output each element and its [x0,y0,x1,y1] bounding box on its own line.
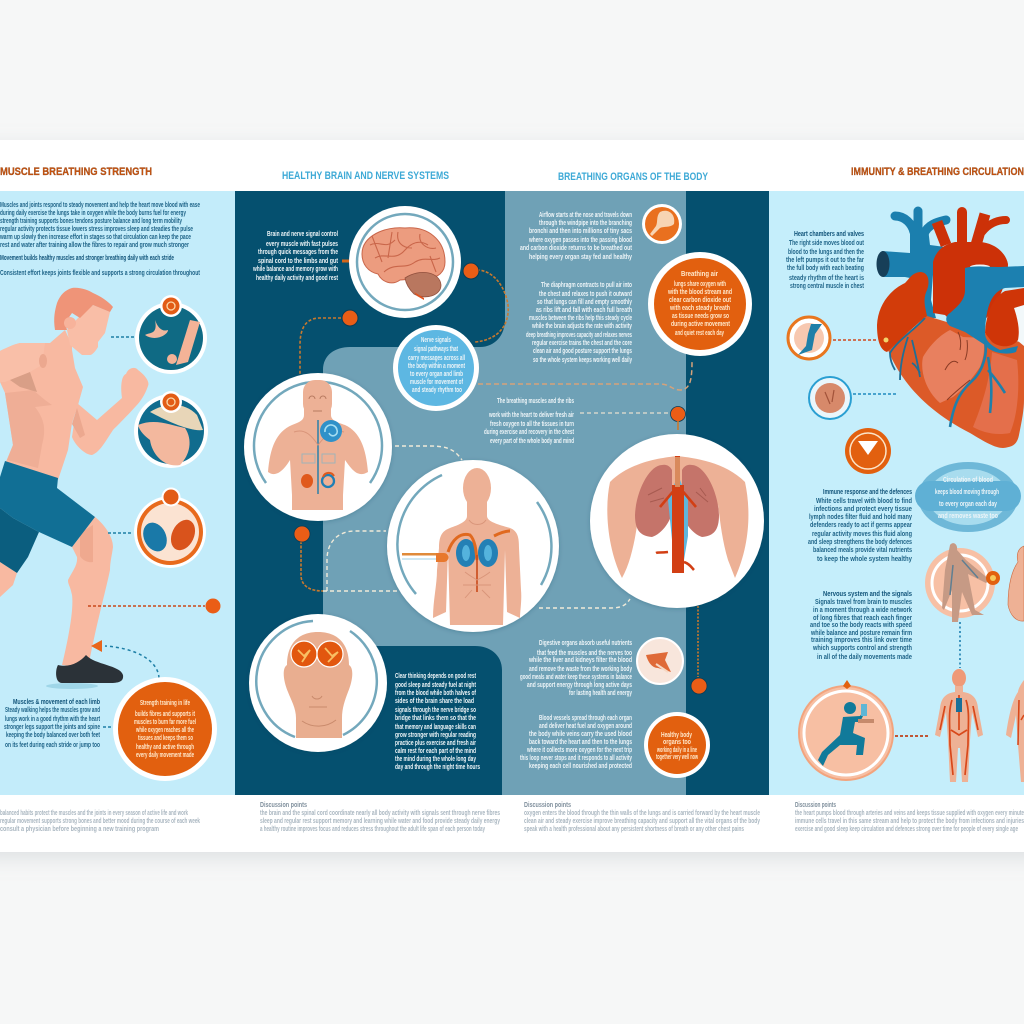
callout: blue circle: carry messages across all [408,355,465,362]
connector: orange dashed to dot [88,598,220,614]
text block: centre A: helping every organ stay fed and healthy [529,254,632,261]
text block: left lower: Muscles & movement of each limb [13,697,100,706]
connector: dashed to centre circle [323,531,398,591]
callout: left orange circle: builds fibres and supports it [135,711,195,718]
illustration: brain circle [342,206,461,318]
text block: right upper: the full body with each beating [787,265,864,272]
icon: wrist joint circle [111,295,207,374]
text block: centre B [526,282,632,364]
callout: big orange circle: lungs share oxygen with [674,281,726,288]
text block: right lower: of long fibres that reach each finger [813,615,912,622]
text block: left lower: stronger legs support the joints and spine [4,724,100,731]
text block: right middle: to keep the whole system healthy [817,556,912,563]
text block: centre A: where oxygen passes into the passing blood [528,237,632,244]
text block: right middle: Immune response and the defences [823,487,912,496]
footer: column 2: the brain and the spinal cord coordinate nearly all body activity with signals sent through nerve fibres [260,810,500,817]
text block: dark lower: Clear thinking depends on good rest [395,673,476,680]
text block: right lower: Signals travel from brain to muscles [815,599,912,606]
illustration: running man [0,288,148,689]
illustration: centre chest circle [387,460,559,632]
marker: orange dot torso [342,310,358,326]
connector: torso dot orange lead [301,541,323,591]
icon: small orange joint circle [642,204,682,244]
text block: brain caption: every muscle with fast pulses [266,241,338,248]
connector: centre to lungs circle [539,599,630,608]
footer: column 1: consult a physician before beginning a new training program [0,826,159,833]
text block: dark lower: sides of the brain share the load [395,698,474,705]
text block: right lower [810,589,912,661]
text block: centre C: every part of the whole body and mind [490,438,574,445]
connector: lungs to lower dot [697,606,699,677]
white poster card [0,140,1024,852]
icon: walking figure circle [925,543,1000,622]
text block: centre B: The diaphragm contracts to pull air into [541,282,632,289]
text block: centre C: during exercise and recovery in the chest [484,429,574,436]
text block: centre E: where it collects more oxygen for the next trip [526,747,632,754]
text block: left lower: Steady walking helps the muscles grow and [5,707,100,714]
text block: centre B: regular exercise trains the chest and the core [532,340,632,347]
text block: dark lower: calm rest for each part of the mind [395,748,476,755]
text block: right middle: regular activity moves this fluid along [812,531,912,538]
text block: right lower: in all of the daily movements made [817,654,912,661]
text block: centre B: so that lungs can fill and empty smoothly [537,299,632,306]
text block: centre A: through the windpipe into the branching [539,220,632,227]
text block: dark lower [395,673,480,771]
connector: dot to torso circle [300,318,341,374]
callout: big orange circle: as tissue needs grow so [672,313,729,320]
callout: blue circle: Nerve signals [421,337,451,344]
illustration: heart [876,211,1024,448]
footer: column 3: clean air and steady exercise improve breathing capacity and support all the vital organs of the body [524,818,760,825]
connector: text to dot [580,412,670,414]
callout: big orange circle: with the blood stream and [667,289,732,296]
text block: right upper: steady rhythm of the heart is [789,275,864,282]
callout: left orange circle [103,677,217,781]
text block: centre B: clean air and good posture support the lungs [533,348,632,355]
callout: big orange circle: Breathing air [681,271,718,278]
text block: centre D: Digestive organs absorb useful nutrients [539,640,632,647]
callout: blue circle [393,325,479,411]
footer: column 2 [260,802,500,833]
callout: left orange circle: while oxygen reaches all the [135,727,194,734]
text block: left intro: Consistent effort keeps joints flexible and supports a strong circulation throughout [0,270,200,277]
illustration: anatomy body [935,669,983,782]
callout: big orange circle: clear carbon dioxide out [669,297,732,304]
footer: column 4 [795,802,1024,833]
icon: shoulder muscle circle [134,391,208,468]
text block: centre B: while the brain adjusts the rate with activity [531,323,632,330]
callout: left orange circle: every daily movement made [136,752,194,759]
text block: centre E: Blood vessels spread through each organ [539,715,632,722]
text block: right lower: in a moment through a wide network [813,607,912,614]
text block: centre A: Airflow starts at the nose and travels down [539,212,632,219]
text block: right upper: strong central muscle in chest [790,283,864,290]
footer: column 3: speak with a health professional about any persistent shortness of breath or any other chest pains [524,826,744,833]
text block: right middle: and sleep strengthens the body defences [808,539,912,546]
text block: right lower: training improves this link over time [811,637,912,644]
text block: right lower: and toe so the body reacts with speed [810,622,912,629]
text block: left intro: regular activity protects tissue lowers stress improves sleep and steadies the pulse [0,226,193,233]
callout: left orange circle: tissues and keeps them so [138,735,193,742]
footer: column 1: regular movement supports strong bones and better mood during the course of each week [0,818,200,825]
callout: small orange circle: organs too [663,739,691,746]
marker: orange dot right middle [670,406,686,430]
callout: blue circle: muscle for movement of [410,379,463,386]
text block: right upper: Heart chambers and valves [794,229,864,238]
text block: dark lower: that memory and language skills can [395,724,476,731]
callout: blue cloud badge: to every organ each day [939,501,997,508]
text block: left lower: keeping the body balanced over both feet [6,732,100,739]
marker: orange dot lower right [691,678,707,694]
text block: left lower [4,697,100,749]
callout: small orange circle: working daily in a line [656,747,697,754]
callout: blue circle: signal pathways that [414,346,458,353]
text block: left lower: on its feet during each stride or jump too [5,742,100,749]
illustration: partial body at edge lower [1006,680,1024,782]
marker: orange dot brain [463,263,479,279]
text block: centre D: that feed the muscles and the nerves too [537,650,632,657]
text block: dark lower: grow stronger with regular reading [395,732,476,739]
arrow: dashed curve to shoe [91,640,159,678]
text block: left lower: lungs work in a good rhythm with the heart [5,716,100,723]
icon: capsule circle [108,488,206,568]
text block: centre E: keeping each cell nourished and protected [529,763,632,770]
footer: column 3 [524,802,760,833]
text block: dark lower: practice plus exercise and fresh air [395,740,476,747]
text block: brain caption: spinal cord to the limbs and gut [258,258,338,265]
callout: left orange circle: healthy and active through [136,744,194,751]
marker: orange dot below torso [294,526,310,542]
text block: right middle: balanced meals provide vital nutrients [813,547,912,554]
text block: brain caption: Brain and nerve signal control [267,231,338,238]
text block: right upper: the left pumps it out to the far [786,257,864,264]
text block: dark lower: day and through the night time hours [395,764,480,771]
text block: centre C: work with the heart to deliver fresh air [488,412,574,419]
text block: left intro: rest and water after training allow the fibres to repair and grow much stronger [0,242,189,249]
heading: centre-left column: HEALTHY BRAIN AND NERVE SYSTEMS [282,170,449,182]
text block: centre B: muscles between the ribs help this steady cycle [529,315,632,322]
text block: left intro: strength training supports bones tendons posture balance and long term mobility [0,218,182,225]
text block: brain caption [252,231,338,282]
panel: centre dark blue with light inset [235,191,769,795]
footer: column 2: sleep and regular rest support memory and learning while water and food provide steady daily energy [260,818,500,825]
callout: small orange circle: Healthy body [661,732,692,739]
text block: right upper: The right side moves blood out [789,240,864,247]
text block: right upper [786,229,864,290]
text block: dark lower: good sleep and steady fuel at night [395,682,476,689]
callout: big orange circle: and quiet rest each day [675,330,724,337]
footer: column 1: balanced habits protect the muscles and the joints in every season of active life and work [0,810,188,817]
illustration: lungs circle [590,434,764,608]
text block: right lower: which supports control and strength [812,645,912,652]
callout: big orange circle: during active movement [671,321,730,328]
connector: blue dotted down [959,622,961,668]
panel: right light blue [769,191,1024,795]
text block: centre A: bronchi and then into millions of tiny sacs [529,228,632,235]
text block: left intro: Movement builds healthy muscles and stronger breathing daily with each stride [0,253,174,262]
text block: dark lower: the mind during the whole long day [395,756,476,763]
text block: left intro: Muscles and joints respond to steady movement and help the heart move blood with ease [0,202,200,209]
callout: blue cloud badge: Circulation of blood [943,477,993,484]
text block: right middle: White cells travel with blood to find [816,498,912,505]
callout: blue cloud badge: and removes waste too [938,513,998,520]
callout: left orange circle: muscles to burn far more fuel [134,719,196,726]
text block: centre A: and carbon dioxide returns to be breathed out [520,245,632,252]
text block: centre B: as ribs lift and fall with each full breath [536,307,632,314]
text block: centre D [520,640,632,697]
text block: centre E: and deliver heat fuel and oxygen around [539,723,632,730]
text block: centre C: fresh oxygen to all the tissues in turn [490,421,574,428]
text block: left intro: during daily exercise the lungs take in oxygen while the body burns fuel for energy [0,210,186,217]
text block: centre B: the chest and relaxes to push it outward [539,291,632,298]
text block: left intro: warm up slowly then increase effort in stages so that circulation can keep the pace [0,234,191,241]
text block: centre B: so the whole system keeps working well daily [533,357,632,364]
icon: valve ring [809,377,898,419]
callout: big orange circle: with each steady breath [669,305,730,312]
text block: brain caption: while balance and memory grow with [252,266,338,273]
callout: blue cloud badge [915,462,1021,532]
callout: blue circle: to every organ and limb [410,371,463,378]
footer: column 3: Discussion points [524,802,571,809]
connector: brain to blue circle [475,270,508,342]
text block: dark lower: from the blood while both halves of [395,690,476,697]
text block: right lower: Nervous system and the signals [823,589,912,598]
icon: lunging figure circle [799,680,930,780]
callout: big orange circle [648,252,752,356]
heading: centre-right column: BREATHING ORGANS OF THE BODY [558,171,709,183]
text block: left intro [0,202,200,277]
text block: centre C: The breathing muscles and the ribs [497,398,574,405]
icon: small stomach circle [637,638,683,684]
text block: centre E: the body while veins carry the used blood [529,731,632,738]
footer: column 2: a healthy routine improves focus and reduces stress throughout the adult life span of each person today [260,826,485,833]
callout: blue circle: and steady rhythm too [412,387,462,394]
illustration: partial body at edge upper [1008,546,1024,621]
callout: small orange circle [644,712,710,778]
text block: right middle [808,487,912,563]
connector: blue circle to right [478,362,692,390]
text block: centre D: for lasting health and energy [569,690,632,697]
text block: centre E: back toward the heart and then to the lungs [529,739,632,746]
text block: centre E [520,715,632,770]
icon: artery ring [788,317,878,359]
text block: centre D: while the liver and kidneys filter the blood [528,657,632,664]
footer: column 1 [0,810,200,833]
callout: left orange circle: Strength training in life [140,700,190,707]
text block: right upper: blood to the lungs and then the [788,249,864,256]
text block: right middle: defenders ready to act if germs appear [810,522,912,529]
text block: centre C [484,398,574,445]
text block: right middle: lymph nodes filter fluid and hold many [809,514,912,521]
text block: brain caption: through quick messages from the [258,249,338,256]
heading: left column: MUSCLE BREATHING STRENGTH [0,166,152,178]
text block: centre E: this loop never stops and it responds to all activity [520,755,632,762]
text block: dark lower: bridge that links them so that the [395,715,476,722]
text block: centre D: good meals and water keep these systems in balance [520,674,632,681]
text block: right lower: while balance and posture remain firm [810,630,912,637]
connector: torso to centre circle [395,446,462,460]
text block: dark lower: signals through the nerve bridge so [395,707,476,714]
illustration: torso circle [244,373,392,521]
text block: centre B: deep breathing improves capacity and relaxes nerves [526,332,632,339]
text block: centre D: and support energy through long active days [527,682,632,689]
text block: brain caption: healthy daily activity and good rest [256,275,338,282]
text block: centre D: and remove the waste from the working body [529,666,632,673]
footer: column 3: oxygen enters the blood through the thin walls of the lungs and is carried forward by the heart muscle [524,810,760,817]
icon: orange triangle badge [845,428,891,474]
text block: centre A [520,212,632,261]
panel: left light blue [0,191,235,795]
footer: column 2: Discussion points [260,802,307,809]
callout: blue circle: the body within a moment [408,363,465,370]
footer: column 4: Discussion points [795,802,836,809]
text block: right middle: infections and protect every tissue [814,506,912,513]
callout: small orange circle: together very well now [656,754,698,761]
illustration: head with brain hemispheres circle [249,614,387,752]
